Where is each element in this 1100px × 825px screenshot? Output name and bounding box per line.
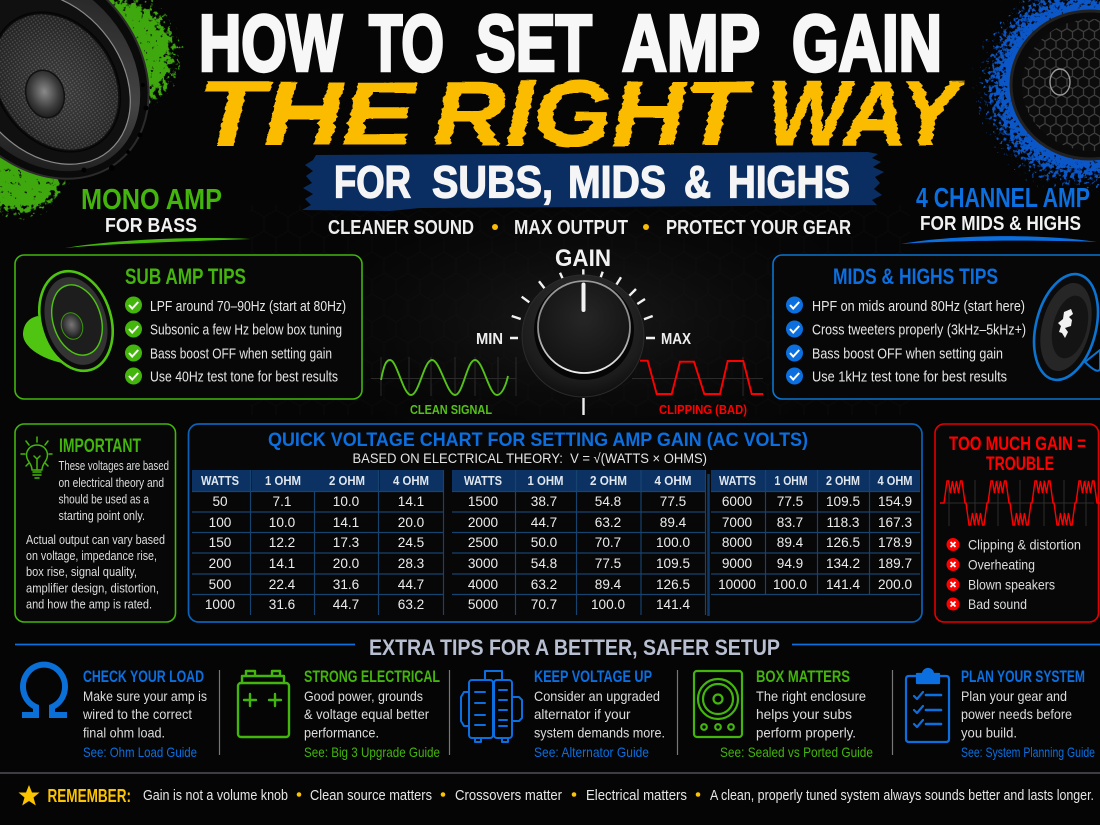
table: 50 to 1000 watts: 28.3 (398, 556, 424, 571)
benefits line: MAX OUTPUT (514, 217, 628, 239)
title line 1 (199, 0, 942, 87)
table: 50 to 1000 watts: 20.0 (333, 556, 360, 571)
remember text: Gain is not a volume knob (143, 788, 288, 804)
title line 2: RIGHT (433, 63, 753, 165)
table: 50 to 1000 watts: 63.2 (398, 597, 424, 612)
note text: These voltages are based (58, 459, 169, 473)
tip: box matters (694, 667, 873, 760)
mono amp label: MONO AMP (81, 184, 222, 216)
title line 1: AMP (622, 0, 760, 87)
title line 2: THE (198, 63, 417, 165)
four channel amp label (901, 182, 1097, 244)
tip text: system demands more. (534, 724, 665, 740)
panel: mids and highs tips (773, 255, 1100, 399)
table: 50 to 1000 watts: 100 (209, 515, 232, 530)
note text: on voltage, impedance rise, (26, 549, 157, 563)
left subwoofer with green splatter (0, 0, 200, 232)
tip text (961, 688, 1072, 740)
table: 6000 to 10000 watts: 200.0 (878, 577, 912, 592)
title line 1: HOW (199, 0, 342, 87)
benefits line: PROTECT YOUR GEAR (666, 217, 851, 239)
tip list: Use 40Hz test tone for best results (150, 370, 338, 386)
icon: light bulb (21, 437, 52, 478)
tip link: See: Ohm Load Guide (83, 744, 197, 760)
table: 50 to 1000 watts (192, 470, 444, 615)
table: 6000 to 10000 watts: 83.7 (777, 515, 803, 530)
note text: starting point only. (58, 509, 145, 523)
table: 1500 to 5000 watts: 3000 (468, 556, 499, 571)
remember bar (18, 785, 1094, 806)
table: 50 to 1000 watts: 24.5 (398, 535, 424, 550)
banner text: FOR (334, 156, 411, 208)
chart: clipping wave (632, 357, 763, 417)
tip heading: STRONG ELECTRICAL (304, 667, 440, 686)
tip text: wired to the correct (82, 706, 192, 722)
tip heading: CHECK YOUR LOAD (83, 667, 204, 686)
icon: star (18, 785, 40, 806)
tip text: final ohm load. (83, 724, 165, 740)
tip link: See: Alternator Guide (534, 744, 649, 760)
panel: too much gain (935, 424, 1100, 622)
chart: clean signal wave (371, 357, 516, 417)
remember text: Electrical matters (586, 788, 687, 804)
table: 50 to 1000 watts: 14.1 (269, 556, 295, 571)
table: 50 to 1000 watts: 44.7 (398, 577, 424, 592)
table: 1500 to 5000 watts: 2 OHM (590, 473, 627, 488)
trouble list (946, 536, 1081, 612)
table: 6000 to 10000 watts (711, 470, 920, 594)
tip text: Make sure your amp is (83, 688, 207, 704)
table: 50 to 1000 watts: 500 (209, 577, 232, 592)
table: 1500 to 5000 watts: 89.4 (595, 577, 622, 592)
table: 6000 to 10000 watts: 6000 (722, 494, 753, 509)
tip text: Consider an upgraded (534, 688, 660, 704)
tip heading: BOX MATTERS (756, 667, 850, 686)
table: 50 to 1000 watts: 17.3 (333, 535, 359, 550)
tip heading: KEEP VOLTAGE UP (534, 667, 652, 686)
remember text: Clean source matters (310, 788, 432, 804)
icon: battery (238, 671, 289, 737)
table: 6000 to 10000 watts: 118.3 (826, 515, 860, 530)
tip text: perform properly. (756, 724, 856, 740)
note text: and how the amp is rated. (26, 598, 152, 612)
table: 6000 to 10000 watts: 189.7 (878, 556, 912, 571)
note text: amplifier design, distortion, (26, 582, 159, 596)
table: 1500 to 5000 watts: 70.7 (595, 535, 621, 550)
chart formula: BASED ON ELECTRICAL THEORY: V = √(WATTS × OHMS) (352, 451, 707, 466)
tip text: alternator if your (534, 706, 631, 722)
table: 6000 to 10000 watts: 134.2 (826, 556, 860, 571)
table: 1500 to 5000 watts: 126.5 (656, 577, 690, 592)
mono amp label: FOR BASS (105, 215, 197, 237)
icon: omega (22, 665, 67, 715)
table: 1500 to 5000 watts: 50.0 (531, 535, 558, 550)
note text: box rise, signal quality, (26, 565, 137, 579)
title line 2 (198, 63, 965, 165)
min label: MIN (476, 331, 503, 348)
title (198, 0, 965, 165)
table: 6000 to 10000 watts: WATTS (719, 473, 756, 488)
table: 50 to 1000 watts: 1 OHM (265, 473, 301, 488)
banner text: SUBS, (432, 156, 553, 208)
gain knob (476, 245, 691, 415)
table: 1500 to 5000 watts: 109.5 (656, 556, 690, 571)
table: 50 to 1000 watts: 50 (212, 494, 228, 509)
subtitle banner (302, 152, 884, 211)
table: 50 to 1000 watts: 44.7 (333, 597, 359, 612)
table: 1500 to 5000 watts: 5000 (468, 597, 499, 612)
trouble list: Blown speakers (968, 576, 1055, 592)
max label: MAX (661, 331, 691, 348)
table: 6000 to 10000 watts: 10000 (718, 577, 756, 592)
trouble list: Bad sound (968, 596, 1027, 612)
table: 50 to 1000 watts: 22.4 (269, 577, 296, 592)
trouble list: Overheating (968, 556, 1035, 572)
table: 50 to 1000 watts: 14.1 (333, 515, 359, 530)
table: 50 to 1000 watts: 14.1 (398, 494, 424, 509)
table: 6000 to 10000 watts: 2 OHM (826, 473, 860, 488)
tip text: & voltage equal better (304, 706, 429, 722)
tip text (534, 688, 665, 740)
tip: strong electrical (238, 667, 440, 760)
table: 6000 to 10000 watts: 8000 (722, 535, 753, 550)
table: 1500 to 5000 watts: 1 OHM (528, 473, 564, 488)
note text: on electrical theory and (58, 476, 164, 490)
tip link: See: Sealed vs Ported Guide (720, 744, 873, 760)
table: 1500 to 5000 watts: 89.4 (660, 515, 687, 530)
table: 1500 to 5000 watts: 77.5 (660, 494, 686, 509)
icon: midrange speaker (1024, 267, 1100, 387)
chart title: QUICK VOLTAGE CHART FOR SETTING AMP GAIN (AC VOLTS) (268, 430, 808, 451)
title line 1: TO (369, 0, 444, 87)
table: 6000 to 10000 watts: 141.4 (826, 577, 860, 592)
table: 1500 to 5000 watts: 100.0 (656, 535, 690, 550)
table: 50 to 1000 watts: 31.6 (269, 597, 295, 612)
note text: Actual output can vary based (26, 533, 165, 547)
knob ticks (510, 269, 655, 338)
table: 6000 to 10000 watts: 126.5 (826, 535, 860, 550)
icon: clipboard (906, 669, 949, 742)
table: 6000 to 10000 watts: 94.9 (777, 556, 803, 571)
tip link: See: Big 3 Upgrade Guide (304, 744, 440, 760)
clean signal label: CLEAN SIGNAL (410, 403, 492, 417)
tip: check your load (22, 665, 207, 760)
table: 50 to 1000 watts: 20.0 (398, 515, 425, 530)
note text: should be used as a (58, 492, 149, 506)
table: 1500 to 5000 watts: 2500 (468, 535, 499, 550)
table: 6000 to 10000 watts: 100.0 (773, 577, 807, 592)
tip text: The right enclosure (756, 688, 866, 704)
table: 6000 to 10000 watts: 167.3 (878, 515, 912, 530)
table: 50 to 1000 watts: 7.1 (273, 494, 291, 509)
table: 1500 to 5000 watts: 4 OHM (654, 473, 692, 488)
tip text: Good power, grounds (304, 688, 423, 704)
chart: distorted wave (940, 480, 1100, 526)
table: 6000 to 10000 watts: 109.5 (826, 494, 860, 509)
table: 6000 to 10000 watts: 7000 (722, 515, 753, 530)
tip list: Bass boost OFF when setting gain (150, 346, 332, 362)
table: 1500 to 5000 watts: WATTS (464, 473, 502, 488)
heading: TROUBLE (986, 454, 1054, 475)
title line 2: WAY (767, 63, 965, 165)
remember text: Crossovers matter (455, 788, 562, 804)
tip list: Subsonic a few Hz below box tuning (150, 322, 342, 338)
table: 50 to 1000 watts: WATTS (201, 473, 239, 488)
tip list: HPF on mids around 80Hz (start here) (812, 299, 1025, 315)
table: 1500 to 5000 watts: 141.4 (656, 597, 690, 612)
table: 1500 to 5000 watts (452, 470, 708, 616)
clipping label: CLIPPING (BAD) (659, 403, 747, 417)
note text (26, 459, 169, 612)
table: 50 to 1000 watts: 2 OHM (329, 473, 365, 488)
banner text: & (684, 156, 711, 208)
table: 1500 to 5000 watts: 54.8 (595, 494, 621, 509)
tip text: power needs before (961, 706, 1072, 722)
panel: quick voltage chart (188, 424, 922, 622)
table: 50 to 1000 watts: 1000 (205, 597, 236, 612)
heading: SUB AMP TIPS (125, 264, 246, 289)
table: 50 to 1000 watts: 4 OHM (393, 473, 429, 488)
table: 6000 to 10000 watts: 89.4 (777, 535, 804, 550)
tip list: Cross tweeters properly (3kHz–5kHz+) (812, 322, 1026, 338)
table: 50 to 1000 watts: 10.0 (269, 515, 296, 530)
panel: sub amp tips (15, 255, 362, 399)
table: 50 to 1000 watts: 31.6 (333, 577, 359, 592)
table: 6000 to 10000 watts: 9000 (722, 556, 753, 571)
extra tips heading: EXTRA TIPS FOR A BETTER, SAFER SETUP (369, 635, 780, 660)
table: 6000 to 10000 watts: 77.5 (777, 494, 803, 509)
tip text: helps your subs (756, 706, 852, 722)
remember text (143, 788, 1094, 804)
heading (949, 434, 1086, 475)
table: 1500 to 5000 watts: 63.2 (531, 577, 557, 592)
tip: plan your system (906, 667, 1095, 760)
benefits line (328, 217, 851, 239)
heading: MIDS & HIGHS TIPS (833, 264, 998, 289)
tip text: performance. (304, 724, 379, 740)
tip text (756, 688, 866, 740)
table: 6000 to 10000 watts: 4 OHM (878, 473, 912, 488)
title line 1: GAIN (792, 0, 942, 87)
table: 50 to 1000 watts: 150 (209, 535, 232, 550)
table: 1500 to 5000 watts: 2000 (468, 515, 499, 530)
table: 1500 to 5000 watts: 44.7 (531, 515, 557, 530)
tip text: Plan your gear and (961, 688, 1067, 704)
tip list: Bass boost OFF when setting gain (812, 346, 1003, 362)
trouble list: Clipping & distortion (968, 536, 1081, 552)
right tweeter speaker with blue splatter (947, 0, 1100, 223)
tip text (304, 688, 429, 740)
table: 6000 to 10000 watts: 178.9 (878, 535, 912, 550)
tip text: you build. (961, 724, 1017, 740)
banner text (334, 156, 850, 208)
banner text: MIDS (568, 156, 666, 208)
tip list: LPF around 70–90Hz (start at 80Hz) (150, 299, 346, 315)
table: 1500 to 5000 watts: 70.7 (531, 597, 557, 612)
tip: keep voltage up (461, 667, 665, 760)
tip list (125, 296, 346, 386)
table: 1500 to 5000 watts: 63.2 (595, 515, 621, 530)
table: 1500 to 5000 watts: 1500 (468, 494, 499, 509)
table: 1500 to 5000 watts: 38.7 (531, 494, 557, 509)
tip text (82, 688, 207, 740)
table: 50 to 1000 watts: 10.0 (333, 494, 360, 509)
heading: IMPORTANT (59, 436, 141, 457)
table: 50 to 1000 watts: 12.2 (269, 535, 295, 550)
icon: subwoofer box (694, 671, 742, 737)
panel: important note (15, 424, 176, 622)
tip list (786, 296, 1026, 386)
table: 1500 to 5000 watts: 4000 (468, 577, 499, 592)
table: 1500 to 5000 watts: 54.8 (531, 556, 557, 571)
benefits line: CLEANER SOUND (328, 217, 474, 239)
title line 1: SET (476, 0, 592, 87)
tip list: Use 1kHz test tone for best results (812, 370, 1007, 386)
table: 1500 to 5000 watts: 100.0 (591, 597, 625, 612)
table: 50 to 1000 watts: 200 (209, 556, 232, 571)
remember label: REMEMBER: (48, 786, 131, 806)
mono amp label (65, 184, 251, 248)
knob dial (522, 275, 644, 397)
banner text: HIGHS (728, 156, 850, 208)
table: 6000 to 10000 watts: 1 OHM (774, 473, 808, 488)
knob label: GAIN (555, 245, 611, 272)
table: 1500 to 5000 watts: 77.5 (595, 556, 621, 571)
icon: alternator (461, 671, 522, 742)
table: 6000 to 10000 watts: 154.9 (878, 494, 912, 509)
icon: subwoofer (23, 262, 124, 380)
